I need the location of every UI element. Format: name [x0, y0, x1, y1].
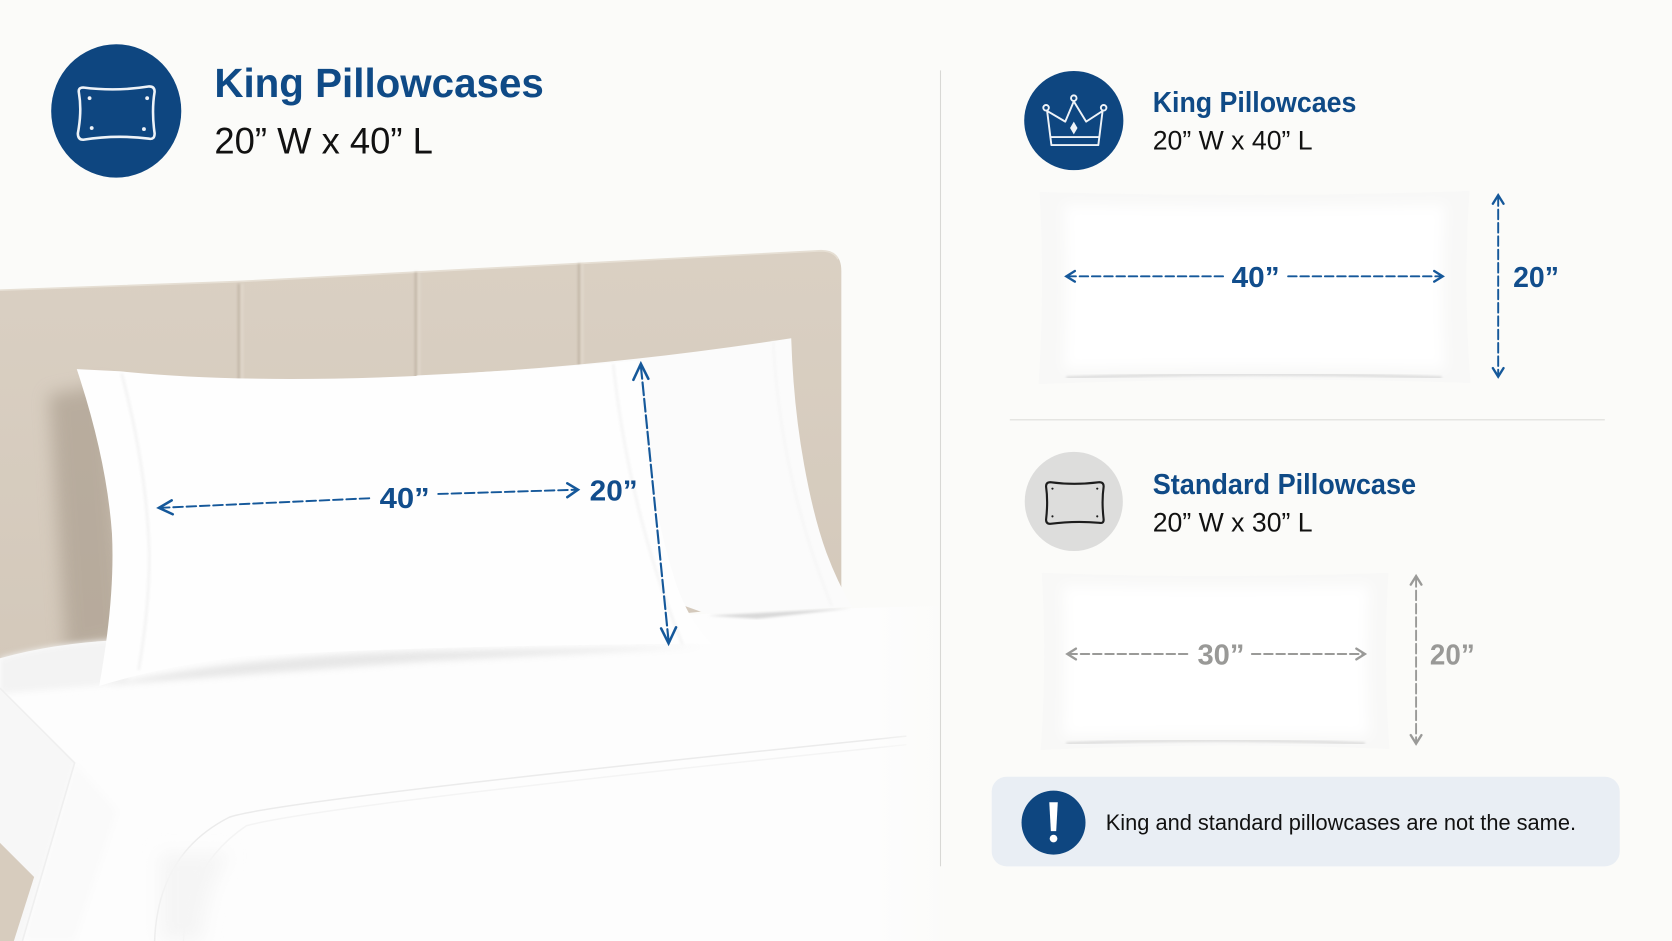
- icon: pillow in blue circle: [51, 44, 181, 178]
- label: king 20 inches: 20”: [1513, 262, 1559, 294]
- size: standard: 20” W x 30” L: [1153, 507, 1313, 537]
- divider: vertical: [940, 70, 941, 866]
- dimension arrow: standard width: [1067, 649, 1365, 659]
- label: 20 inches on bed pillow: 20”: [590, 475, 638, 507]
- photo: bed with pillows: [0, 251, 944, 941]
- standard pillow: [1041, 573, 1389, 750]
- dimension arrow: 20 inch height on bed pillow: [633, 364, 676, 643]
- king pillow: [1039, 191, 1470, 384]
- headboard: [0, 251, 841, 683]
- pillow shadow on headboard: [49, 384, 126, 653]
- callout text: King and standard pillowcases are not the same.: [1106, 810, 1576, 835]
- icon: exclamation: [1022, 791, 1086, 855]
- divider: horizontal: [1010, 419, 1605, 420]
- label: king 40 inches: 40”: [1232, 262, 1280, 294]
- front pillow: [77, 361, 711, 686]
- icon: pillow in grey circle: [1025, 452, 1123, 551]
- title: King Pillowcases: [214, 60, 544, 106]
- dimension arrow: king width: [1066, 271, 1443, 282]
- label: standard 30 inches: 30”: [1197, 640, 1244, 672]
- heading: standard: Standard Pillowcase: [1153, 469, 1416, 501]
- subtitle: 20” W x 40” L: [214, 120, 433, 162]
- callout: [992, 777, 1620, 866]
- label: 40 inches on bed pillow: 40”: [380, 483, 430, 515]
- label: standard 20 inches: 20”: [1430, 640, 1475, 672]
- icon: crown in blue circle: [1024, 71, 1123, 170]
- bed and sheets: [0, 597, 944, 941]
- back pillow: [416, 338, 852, 619]
- heading: king: King Pillowcaes: [1153, 87, 1356, 119]
- dimension arrow: 40 inch width on bed pillow: [159, 483, 578, 514]
- size: king: 20” W x 40” L: [1153, 125, 1313, 155]
- dimension arrow: standard height: [1411, 576, 1421, 744]
- dimension arrow: king height: [1493, 195, 1504, 377]
